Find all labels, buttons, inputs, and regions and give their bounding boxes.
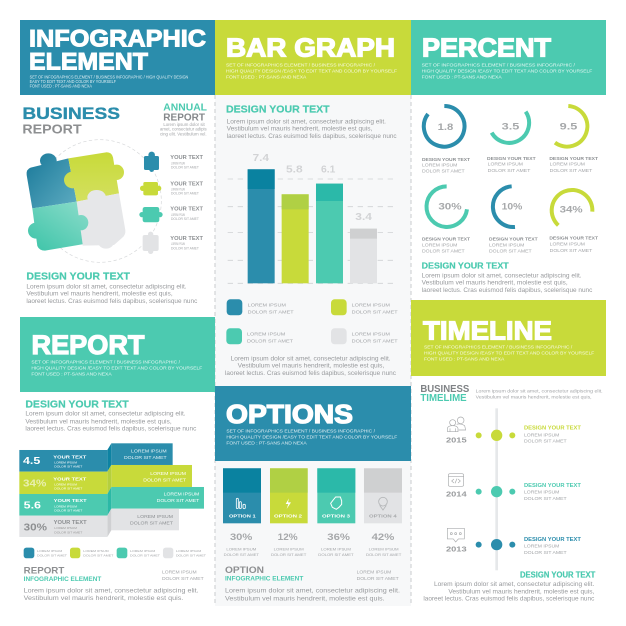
ring labels: DESIGN YOUR TEXT [487,156,536,162]
ring labels: LOREM IPSUM [422,162,457,168]
ring values: 1.8 [438,122,453,132]
ring values: 3.5 [502,121,519,131]
ring labels: DESIGN YOUR TEXT [422,237,470,243]
staircase chart: DOLOR SIT AMET [54,508,83,512]
timeline entry 2015 [446,417,582,445]
icon: bars [236,498,245,509]
timeline entry 2013 [446,528,582,556]
bar chart legend: DOLOR SIT AMET [248,309,294,315]
text block: design your text: DESIGN YOUR TEXT [422,261,509,271]
ring labels: DOLOR SIT AMET [422,249,465,255]
timeline entry 2015: 2015 [446,436,468,445]
heading: business report: BUSINESS [22,104,120,123]
text block: option infographic element: Vestibulum vel mauris hendrerit, molestie est quis. [225,595,385,602]
staircase chart: 5.6 [24,500,42,511]
panel: options [215,386,411,602]
ring values [438,121,584,214]
puzzle legend text: DOLOR SIT AMET [171,246,199,250]
header: infographic element: INFOGRAPHIC [29,26,206,52]
text block: design your text: Lorem ipsum dolor sit amet, consectetur adipiscing elit. [25,411,186,418]
header: report: FONT USED : PT-SANS AND NEXA [31,372,113,377]
header: options: SET OF INFOGRAPHICS ELEMENT / BUSINESS INFOGRAPHIC / [226,428,376,433]
centered paragraph: Lorem ipsum dolor sit amet, consectetur adipiscing elit. [231,355,391,362]
staircase chart: DOLOR SIT AMET [124,455,167,460]
puzzle legend text: YOUR TEXT [170,181,204,187]
text block: design your text [26,271,198,305]
bar chart legend: LOREM IPSUM [248,302,286,308]
centered paragraph [225,355,397,377]
header: options [215,386,411,461]
puzzle legend text: LOREM IPSUM [171,213,185,217]
text block: report infographic element: Vestibulum vel mauris hendrerit, molestie est quis. [24,595,183,602]
header: bar graph [215,20,411,95]
staircase chart: DOLOR SIT AMET [130,520,173,525]
option values: DOLOR SIT AMET [318,553,355,557]
timeline entry 2015: LOREM IPSUM [524,432,559,438]
text block: design your text [25,399,197,433]
panel: timeline [411,300,606,603]
timeline entry 2014: 2014 [446,490,468,499]
header: timeline: TIMELINE [423,316,552,346]
text block: design your text: laoreet lectus. Cras euismod felis dapibus, scelerisque nunc [26,298,198,305]
header: percent: PERCENT [422,32,551,62]
puzzle legend text: LOREM IPSUM [171,162,185,166]
staircase chart: LOREM IPSUM [54,461,78,465]
bar chart: 7.4 [253,153,270,164]
header: infographic element [20,20,215,95]
option values: 30% [230,532,253,542]
option values: LOREM IPSUM [321,548,351,552]
staircase chart: DOLOR SIT AMET [157,498,199,503]
chart legend [24,548,206,558]
ring labels: DOLOR SIT AMET [422,169,465,175]
option values: DOLOR SIT AMET [271,553,307,557]
text block: report infographic element: Lorem ipsum dolor sit amet, consectetur adipiscing elit. [24,587,199,594]
text block: design your text: Lorem ipsum dolor sit amet, consectetur adipiscing elit. [26,283,187,290]
bar chart legend: LOREM IPSUM [352,302,390,308]
timeline entry 2013: DESIGN YOUR TEXT [524,537,582,543]
text block: design your text: Vestibulum vel mauris hendrerit, molestie est quis, [422,280,568,287]
timeline entry 2014: DESIGN YOUR TEXT [524,483,582,489]
header: options: FONT USED : PT-SANS AND NEXA [226,441,308,446]
header: bar graph: SET OF INFOGRAPHICS ELEMENT / BUSINESS INFOGRAPHIC / [226,62,376,67]
header: report: SET OF INFOGRAPHICS ELEMENT / BUSINESS INFOGRAPHIC / [31,360,181,365]
staircase chart: LOREM IPSUM [131,449,167,454]
text block: design your text: laoreet lectus. Cras euismod felis dapibus, scelerisque nunc [423,596,595,603]
staircase chart: 34% [23,479,46,490]
text block: design your text: Lorem ipsum dolor sit amet, consectetur adipiscing elit. [227,118,386,125]
header: infographic element: FONT USED : PT-SANS AND NEXA [30,84,93,89]
text block: design your text: DESIGN YOUR TEXT [25,399,129,410]
puzzle legend text: YOUR TEXT [170,236,204,242]
ring labels: DESIGN YOUR TEXT [489,237,538,243]
staircase chart: YOUR TEXT [54,520,87,526]
bar chart legend: LOREM IPSUM [247,331,285,337]
chart legend: LOREM IPSUM [176,549,202,553]
ring gauges [424,106,592,227]
puzzle legend icons [139,152,163,254]
icon: lightning [286,498,291,509]
text block: design your text: Vestibulum vel mauris hendrerit, molestie est quis, [448,588,594,595]
timeline entry 2013: LOREM IPSUM [524,544,559,550]
text block: option infographic element: DOLOR SIT AMET [357,576,399,582]
staircase chart: LOREM IPSUM [164,492,199,497]
header: percent: SET OF INFOGRAPHICS ELEMENT / BUSINESS INFOGRAPHIC / [422,62,576,67]
staircase chart: LOREM IPSUM [150,471,186,476]
header: timeline: SET OF INFOGRAPHICS ELEMENT / BUSINESS INFOGRAPHIC / [424,345,573,350]
header: infographic element: SET OF INFOGRAPHICS ELEMENT / BUSINESS INFOGRAPHIC / HIGH QUALITY DESIGN [30,74,188,79]
text block: report infographic element: REPORT [24,565,65,575]
header: timeline: HIGH QUALITY DESIGN /EASY TO EDIT TEXT AND COLOR BY YOURSELF [424,351,594,356]
timeline entry 2015: DOLOR SIT AMET [524,439,567,445]
heading: business timeline: BUSINESS [420,384,470,395]
icon: code window [448,474,464,486]
option values: 42% [372,532,395,542]
puzzle legend text: LOREM IPSUM [171,242,185,246]
text block: report infographic element: DOLOR SIT AMET [162,576,204,582]
chart legend: LOREM IPSUM [37,549,63,553]
timeline entry 2013: 2013 [446,545,467,554]
header: timeline: FONT USED : PT-SANS AND NEXA [424,357,505,362]
heading: business timeline: TIMELIME [420,393,467,404]
timeline entry 2014 [446,474,582,502]
annual report note: ANNUAL [163,102,207,113]
puzzle legend text [170,155,204,250]
text block: report infographic element [24,565,204,602]
heading: business report: REPORT [22,121,82,136]
header: percent: HIGH QUALITY DESIGN /EASY TO EDIT TEXT AND COLOR BY YOURSELF [422,69,592,74]
staircase chart: LOREM IPSUM [54,482,78,486]
ring labels: LOREM IPSUM [422,242,457,248]
ring labels [422,156,598,255]
ring labels: LOREM IPSUM [489,242,524,248]
staircase chart: DOLOR SIT AMET [54,530,83,534]
ring values: 10% [502,202,523,212]
option values: 36% [327,532,351,542]
staircase chart: YOUR TEXT [53,476,86,482]
chart legend: DOLOR SIT AMET [37,553,67,557]
icon: chat bubble [447,528,464,542]
text block: design your text: laoreet lectus. Cras euismod felis dapibus, scelerisque nunc [25,426,197,433]
text block: design your text: Lorem ipsum dolor sit amet, consectetur adipiscing elit. [422,272,582,279]
text block: option infographic element: Lorem ipsum dolor sit amet, consectetur adipiscing elit. [225,587,400,594]
annual report note: REPORT [163,112,205,123]
timeline entry 2014: LOREM IPSUM [524,490,559,496]
ring values: 30% [438,202,463,212]
option values: DOLOR SIT AMET [224,553,260,557]
puzzle legend text: DOLOR SIT AMET [171,166,199,170]
staircase chart: YOUR TEXT [54,498,87,504]
text block: report infographic element: LOREM IPSUM [162,570,197,576]
option values [224,532,402,557]
bar chart [228,153,397,283]
puzzle legend text: YOUR TEXT [170,155,204,161]
header: options: OPTIONS [226,399,353,429]
text block: design your text: DESIGN YOUR TEXT [520,570,595,579]
text block: design your text: Lorem ipsum dolor sit amet, consectetur adipiscing elit. [434,581,594,588]
text block: report infographic element: INFOGRAPHIC ELEMENT [24,576,101,583]
ring labels: DESIGN YOUR TEXT [422,157,470,163]
annual report note: Lorem ipsum dolor sit [163,122,205,127]
icon: map blob [331,497,342,509]
timeline entry 2013: DOLOR SIT AMET [524,550,567,556]
option values: LOREM IPSUM [369,548,399,552]
bar chart legend [226,299,398,344]
chart legend: DOLOR SIT AMET [130,553,160,557]
annual report note: amet, consectetur adipis [160,127,207,132]
staircase chart: 30% [24,522,47,533]
text block: design your text: DESIGN YOUR TEXT [26,271,130,282]
header: percent: FONT USED : PT-SANS AND NEXA [422,75,503,80]
panel: percent [411,20,606,294]
panel: business report [20,20,215,305]
text block: option infographic element: OPTION [225,565,264,575]
ring labels: DOLOR SIT AMET [489,249,532,255]
ring values: 34% [560,204,584,214]
timeline axis [495,408,498,570]
staircase chart: DOLOR SIT AMET [143,477,186,482]
icon: people [447,417,466,432]
bar chart legend: DOLOR SIT AMET [352,309,398,315]
header: percent [411,20,606,95]
option values: DOLOR SIT AMET [366,553,402,557]
bar chart: 3.4 [355,212,373,223]
staircase chart: LOREM IPSUM [54,526,78,530]
ring labels: LOREM IPSUM [550,162,585,168]
ring labels: DOLOR SIT AMET [488,168,530,174]
header: options: HIGH QUALITY DESIGN /EASY TO EDIT TEXT AND COLOR BY YOURSELF [226,435,397,440]
chart legend: LOREM IPSUM [130,549,156,553]
heading: business timeline: Lorem ipsum dolor sit amet, consectetur adipiscing elit. [476,388,603,393]
centered paragraph: Vestibulum vel mauris hendrerit, molestie est quis, [238,363,384,370]
icon: bulb [379,497,387,510]
text block: design your text [226,105,397,140]
header: infographic element: ELEMENT [29,48,148,76]
dashed circle [39,140,161,262]
ring labels: DESIGN YOUR TEXT [549,156,598,162]
option values: 12% [278,532,298,542]
ring labels: LOREM IPSUM [550,242,585,248]
text block: design your text [422,261,593,294]
chart legend: LOREM IPSUM [83,549,109,553]
ring labels: DOLOR SIT AMET [550,248,592,254]
centered paragraph: laoreet lectus. Cras euismod felis dapibus, scelerisque nunc [225,370,397,377]
text block: design your text: Vestibulum vel mauris hendrerit, molestie est quis, [26,291,173,298]
text block: design your text: laoreet lectus. Cras euismod felis dapibus, scelerisque nunc [227,133,397,140]
header: bar graph: BAR GRAPH [226,32,395,62]
panel: report [19,317,215,602]
timeline entry 2015: DESIGN YOUR TEXT [524,425,582,431]
header: report: HIGH QUALITY DESIGN /EASY TO EDIT TEXT AND COLOR BY YOURSELF [31,366,202,371]
staircase chart: DOLOR SIT AMET [54,487,83,491]
text block: design your text: DESIGN YOUR TEXT [226,105,330,116]
header: infographic element: EASY TO EDIT TEXT AND COLOR BY YOURSELF [30,79,116,84]
text block: option infographic element [225,565,400,602]
bar chart legend: DOLOR SIT AMET [352,338,398,344]
staircase chart: YOUR TEXT [53,454,86,460]
option cards: OPTION 1 [229,513,256,519]
staircase chart: LOREM IPSUM [54,504,78,508]
puzzle legend text: DOLOR SIT AMET [171,217,199,221]
puzzle legend text: YOUR TEXT [170,207,204,213]
staircase chart [19,443,204,537]
chart legend: DOLOR SIT AMET [176,553,206,557]
staircase chart: LOREM IPSUM [137,514,173,519]
bar chart legend: DOLOR SIT AMET [247,338,293,344]
option values: LOREM IPSUM [226,548,256,552]
puzzle legend text: DOLOR SIT AMET [171,192,199,196]
option cards: OPTION 2 [274,513,302,519]
bar chart: 5.8 [286,165,303,176]
staircase chart: DOLOR SIT AMET [54,465,83,469]
annual report note [160,102,207,136]
option values: LOREM IPSUM [274,548,304,552]
ring labels: LOREM IPSUM [488,162,523,168]
header: timeline [411,300,606,376]
header: report [20,317,215,392]
ring labels: DOLOR SIT AMET [550,168,592,174]
heading: business timeline [420,384,603,404]
ring labels: DESIGN YOUR TEXT [549,236,598,242]
header: report: REPORT [32,330,145,360]
heading: business timeline: Vestibulum vel mauris hendrerit, molestie est quis, [476,394,592,399]
option cards [223,468,402,523]
annual report note: cing elit. Vestibulum vel. [160,131,207,136]
text block: option infographic element: INFOGRAPHIC ELEMENT [225,576,303,583]
text block: design your text: laoreet lectus. Cras euismod felis dapibus, scelerisque nunc [422,287,593,294]
bar chart: 6.1 [321,165,336,176]
puzzle legend text: LOREM IPSUM [171,188,185,192]
heading: business report [22,104,120,136]
puzzle graphic [27,152,125,251]
text block: design your text: Vestibulum vel mauris hendrerit, molestie est quis, [25,418,172,425]
chart legend: DOLOR SIT AMET [83,553,114,557]
text block: option infographic element: LOREM IPSUM [357,570,391,576]
bar chart legend: LOREM IPSUM [352,331,390,337]
text block: design your text: Vestibulum vel mauris hendrerit, molestie est quis, [227,126,372,133]
panel: bar graph [215,20,411,377]
option cards: OPTION 3 [322,513,350,519]
ring values: 9.5 [560,121,577,131]
header: bar graph: FONT USED : PT-SANS AND NEXA [226,75,307,80]
header: bar graph: HIGH QUALITY DESIGN /EASY TO EDIT TEXT AND COLOR BY YOURSELF [226,69,397,74]
option cards: OPTION 4 [369,513,397,519]
text block: design your text [423,570,595,603]
timeline entry 2014: DOLOR SIT AMET [524,496,567,502]
staircase chart: 4.5 [23,456,41,467]
